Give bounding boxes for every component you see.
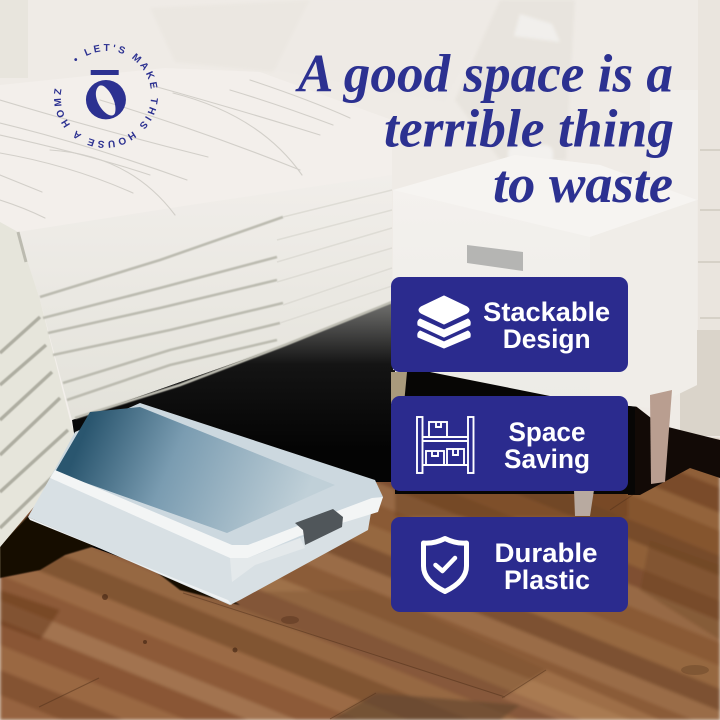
badge: stackable design: Design <box>503 324 591 354</box>
headline: to waste <box>493 154 673 214</box>
badge: durable plastic <box>391 517 628 612</box>
lid panel <box>55 407 335 533</box>
lid outer <box>50 403 383 558</box>
dark shadow under bed <box>30 298 395 600</box>
storage bin <box>28 403 383 605</box>
icon: layers <box>418 296 470 348</box>
wall panels on the right <box>650 0 720 436</box>
badge: stackable design: Stackable <box>483 297 610 327</box>
latch handle <box>295 509 343 545</box>
badge: space saving: Saving <box>504 444 590 474</box>
faint side stripes <box>277 190 392 323</box>
headline: A good space is a <box>295 44 673 104</box>
badge: durable plastic: Plastic <box>504 565 590 595</box>
badge: space saving <box>391 396 628 491</box>
thin top stitching <box>0 80 350 218</box>
wood knots <box>102 594 709 675</box>
badge: stackable design <box>391 277 628 372</box>
floor shadow at wall <box>628 400 720 495</box>
logo badge <box>54 44 158 148</box>
pillows <box>150 0 510 102</box>
lid rim <box>50 470 383 558</box>
badge: space saving: Space <box>508 417 586 447</box>
circular slogan: • LET'S MAKE THIS HOUSE A HOMZ <box>54 44 158 148</box>
logo mark <box>86 70 126 119</box>
lamp <box>455 0 575 165</box>
headline: terrible thing <box>384 98 674 158</box>
icon: shelf with boxes <box>417 417 474 473</box>
side tab <box>230 538 305 582</box>
darker plank patches <box>183 590 546 697</box>
bed and blanket <box>0 68 392 547</box>
floor <box>0 440 720 720</box>
headline <box>295 44 674 214</box>
nightstand <box>391 155 697 516</box>
bin base <box>28 478 372 605</box>
icon: shield with check <box>424 538 466 592</box>
drape stripes <box>0 317 72 528</box>
badge: durable plastic: Durable <box>494 538 598 568</box>
floor plank seams <box>39 490 640 719</box>
fuzzy side stripes <box>40 217 392 418</box>
